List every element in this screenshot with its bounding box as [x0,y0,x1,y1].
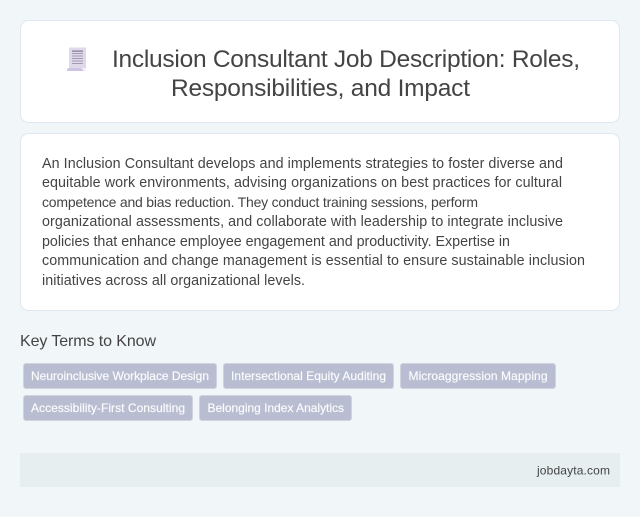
title: Inclusion Consultant Job Description: Roles, [112,46,580,73]
footer bar [20,453,620,487]
description text: organizational assessments, and collaborate with leadership to integrate inclusive [42,214,563,230]
title [112,46,580,102]
description text: initiatives across all organizational levels. [42,273,305,289]
tag: Neuroinclusive Workplace Design: Neuroinclusive Workplace Design [31,369,209,383]
tag: Microaggression Mapping [400,364,556,388]
panel: description card [20,134,620,310]
tag: Belonging Index Analytics [200,396,352,420]
description text [42,156,585,289]
tag: Intersectional Equity Auditing [224,364,394,388]
description text: An Inclusion Consultant develops and implements strategies to foster diverse and [42,156,563,172]
tag list [24,364,556,420]
tag: Intersectional Equity Auditing: Intersectional Equity Auditing [231,369,386,383]
description text: policies that enhance employee engagement and productivity. Expertise in [42,234,510,250]
tag: Belonging Index Analytics: Belonging Index Analytics [208,401,344,415]
tag: Accessibility-First Consulting [24,396,192,420]
description text: equitable work environments, advising organizations on best practices for cultural [42,175,562,191]
footer bar: jobdayta.com [536,464,610,478]
panel: title card [20,20,620,122]
description text: competence and bias reduction. They conduct training sessions, perform [42,194,478,210]
icon: document scroll [67,48,86,71]
heading: key terms: Key Terms to Know [20,333,156,350]
title: Responsibilities, and Impact [171,75,470,102]
tag: Microaggression Mapping: Microaggression Mapping [408,369,548,383]
description text: communication and change management is essential to ensure sustainable inclusion [42,253,585,269]
tag: Neuroinclusive Workplace Design [24,364,216,388]
tag: Accessibility-First Consulting: Accessibility-First Consulting [31,401,185,415]
